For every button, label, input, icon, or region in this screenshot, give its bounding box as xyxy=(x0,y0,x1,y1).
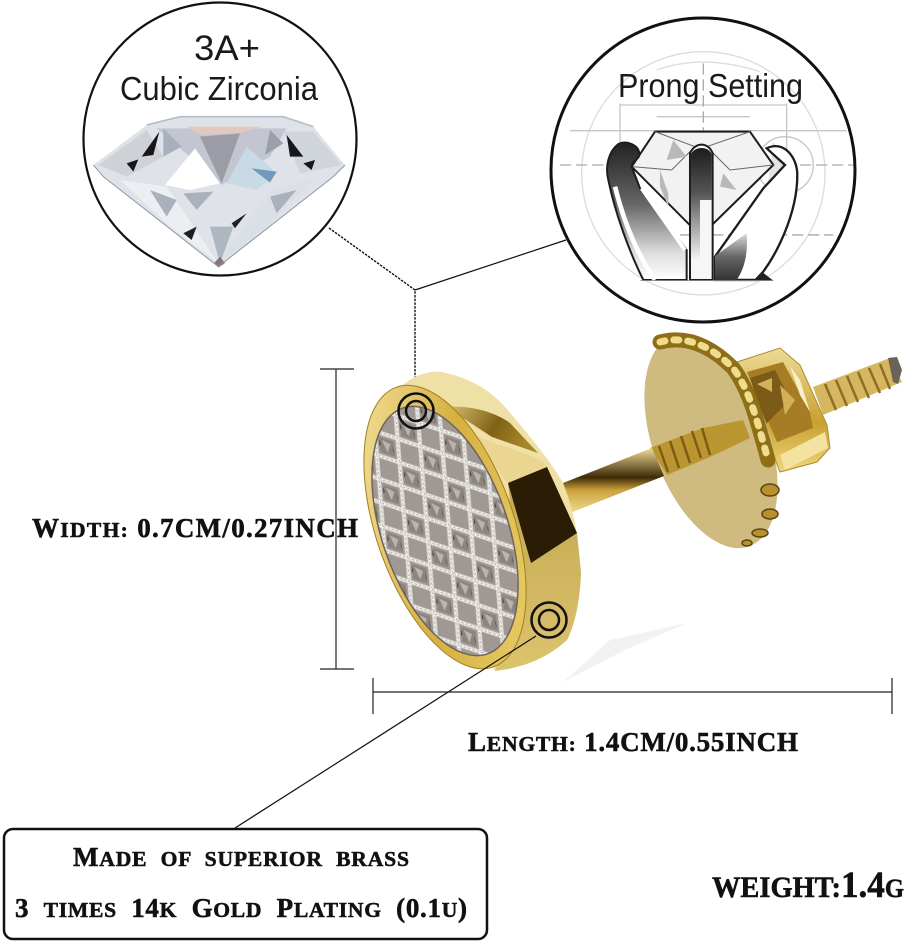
marker: stone xyxy=(398,394,434,428)
bezel rim xyxy=(332,365,558,689)
backing disc xyxy=(618,316,804,566)
reflection smudge xyxy=(563,623,687,682)
illustration: prong technical drawing xyxy=(560,52,853,295)
band middle highlight xyxy=(478,437,547,483)
label: width: WIDTH: 0.7CM/0.27INCH xyxy=(32,513,358,543)
dimension: length bracket xyxy=(373,678,892,714)
text: brass: MADE OF SUPERIOR BRASS xyxy=(73,842,409,872)
thread tip xyxy=(888,357,902,384)
earring photo xyxy=(332,316,902,689)
icon: diamond xyxy=(93,117,345,268)
diamond outline xyxy=(632,132,773,236)
label: length: LENGTH: 1.4CM/0.55INCH xyxy=(468,727,798,757)
beaded disc edge xyxy=(660,340,768,460)
post xyxy=(563,448,664,513)
heading: 3A+: 3A+ xyxy=(194,29,260,68)
dimension: width bracket xyxy=(320,369,354,669)
left prong xyxy=(607,143,687,280)
thread end xyxy=(813,358,902,415)
text: plating: 3 TIMES 14K GOLD PLATING (0.1U) xyxy=(15,893,467,923)
leader line: plating xyxy=(235,636,536,828)
label: weight: WEIGHT:1.4G xyxy=(712,865,904,906)
marker: plating xyxy=(532,602,566,638)
back nut xyxy=(737,348,830,472)
heading: Prong Setting: Prong Setting xyxy=(618,67,803,104)
bezel side band xyxy=(396,372,581,671)
thread ridges xyxy=(825,364,890,410)
post thread detail xyxy=(659,428,710,472)
centre prong xyxy=(690,145,713,280)
threaded post xyxy=(650,420,750,475)
callout box: material xyxy=(4,829,487,939)
lower beads xyxy=(742,484,779,546)
right prong xyxy=(715,146,797,280)
band dark reflection xyxy=(508,467,577,563)
pave stones xyxy=(343,388,547,674)
callout: prong setting xyxy=(551,18,855,322)
band dark reflection strip xyxy=(446,407,538,453)
bead highlights xyxy=(660,340,768,460)
diamond facets xyxy=(632,132,773,170)
leader line: prong setting xyxy=(415,240,566,290)
callout: cubic zirconia xyxy=(84,2,356,276)
band lower xyxy=(495,467,581,671)
heading: Cubic Zirconia: Cubic Zirconia xyxy=(120,70,319,107)
leader line: zirconia to stone xyxy=(329,228,415,396)
